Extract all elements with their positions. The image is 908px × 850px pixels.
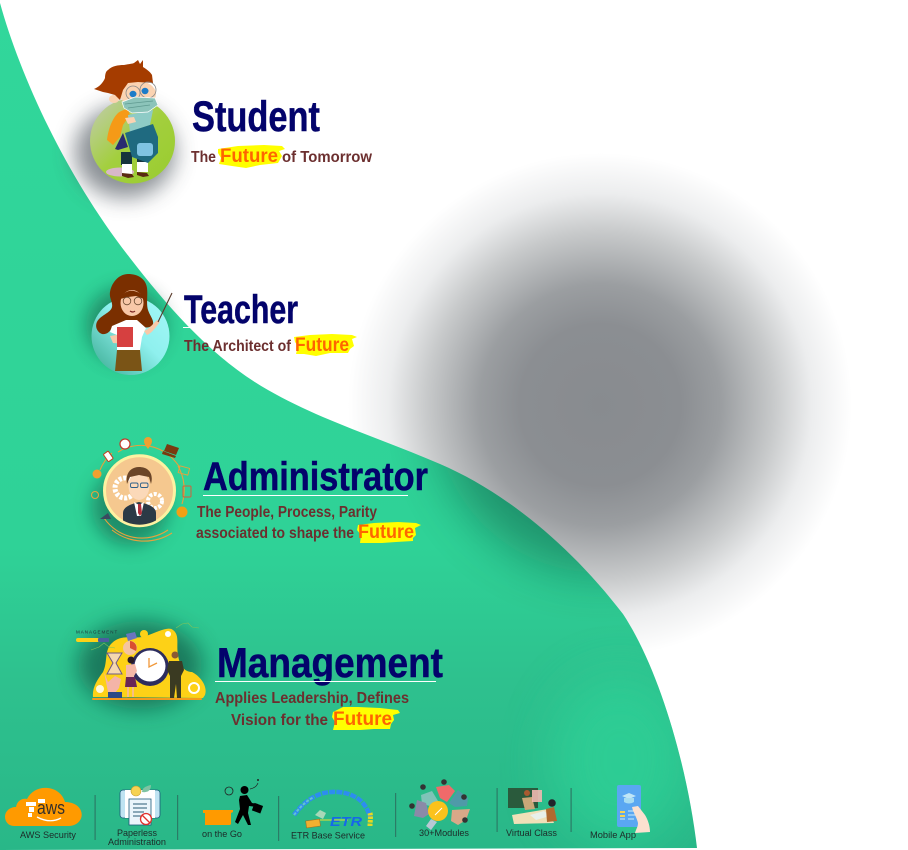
text: management tagline: Future <box>333 709 392 730</box>
icon: pie chart <box>92 470 102 478</box>
divider underline <box>203 495 408 496</box>
text: student tagline: The <box>191 149 216 166</box>
icon: clipboard <box>183 486 191 497</box>
text: management tagline: Applies Leadership, Defines <box>215 690 409 707</box>
feature: paperless administration: Paperless <box>117 828 157 839</box>
icon: globe <box>176 506 188 518</box>
heading: management: Management <box>217 639 443 686</box>
panel: administrator <box>92 437 428 545</box>
feature: aws security: aws <box>37 798 65 818</box>
icon: administrator portrait <box>92 437 191 545</box>
icon: megaphone <box>100 513 111 519</box>
text: management tagline <box>215 690 409 730</box>
heading: teacher: Teacher <box>184 288 298 332</box>
feature: 30+ modules: 30+Modules <box>419 828 469 839</box>
icon: envelope <box>178 466 190 475</box>
feature: etr base service <box>291 792 370 842</box>
panel: management <box>76 621 443 730</box>
text: management tagline: Vision for the <box>231 712 328 729</box>
text: administrator tagline: Future <box>358 522 414 543</box>
icon: student character <box>75 60 175 198</box>
feature: aws security <box>5 788 82 841</box>
feature: etr base service: ETR Base Service <box>291 830 365 842</box>
feature: paperless administration <box>108 785 166 848</box>
icon: management illustration <box>76 621 206 709</box>
text: teacher tagline: Future <box>295 335 349 356</box>
feature: on the go: on the Go <box>202 829 242 840</box>
icon: alarm clock <box>120 439 130 449</box>
panel: student <box>75 60 373 198</box>
text: student tagline <box>191 145 373 168</box>
feature: paperless administration: Administration <box>108 837 166 848</box>
management label: MANAGEMENT <box>76 630 118 634</box>
icon: location pin <box>144 437 152 449</box>
feature: virtual class <box>506 788 557 839</box>
text: administrator tagline: The People, Process, Parity <box>197 504 377 521</box>
feature: virtual class: Virtual Class <box>506 828 557 839</box>
footer feature strip <box>5 779 650 848</box>
text: student tagline: Future <box>220 146 278 167</box>
icon: phone <box>103 451 113 462</box>
divider underline <box>215 681 436 682</box>
panel: teacher <box>86 274 357 375</box>
text: teacher tagline <box>184 334 357 356</box>
icon: laptop <box>162 444 179 458</box>
icon: light bulb <box>92 492 98 498</box>
feature: mobile app: Mobile App <box>590 830 636 841</box>
text: administrator tagline: associated to shape the <box>196 525 354 542</box>
feature: aws security: AWS Security <box>20 830 76 841</box>
icon: teacher character <box>86 274 172 375</box>
feature: etr base service: ETR <box>330 814 363 829</box>
heading: student: Student <box>192 93 320 141</box>
text: teacher tagline: The Architect of <box>184 338 292 355</box>
feature: on the go <box>202 779 263 840</box>
grey blurred blob <box>348 153 852 657</box>
text: administrator tagline <box>196 504 421 543</box>
feature: 30+ modules <box>409 779 470 839</box>
heading: administrator: Administrator <box>203 455 428 499</box>
text: student tagline: of Tomorrow <box>282 149 373 166</box>
decorative underline stub <box>183 327 193 328</box>
feature: mobile app <box>590 785 650 841</box>
